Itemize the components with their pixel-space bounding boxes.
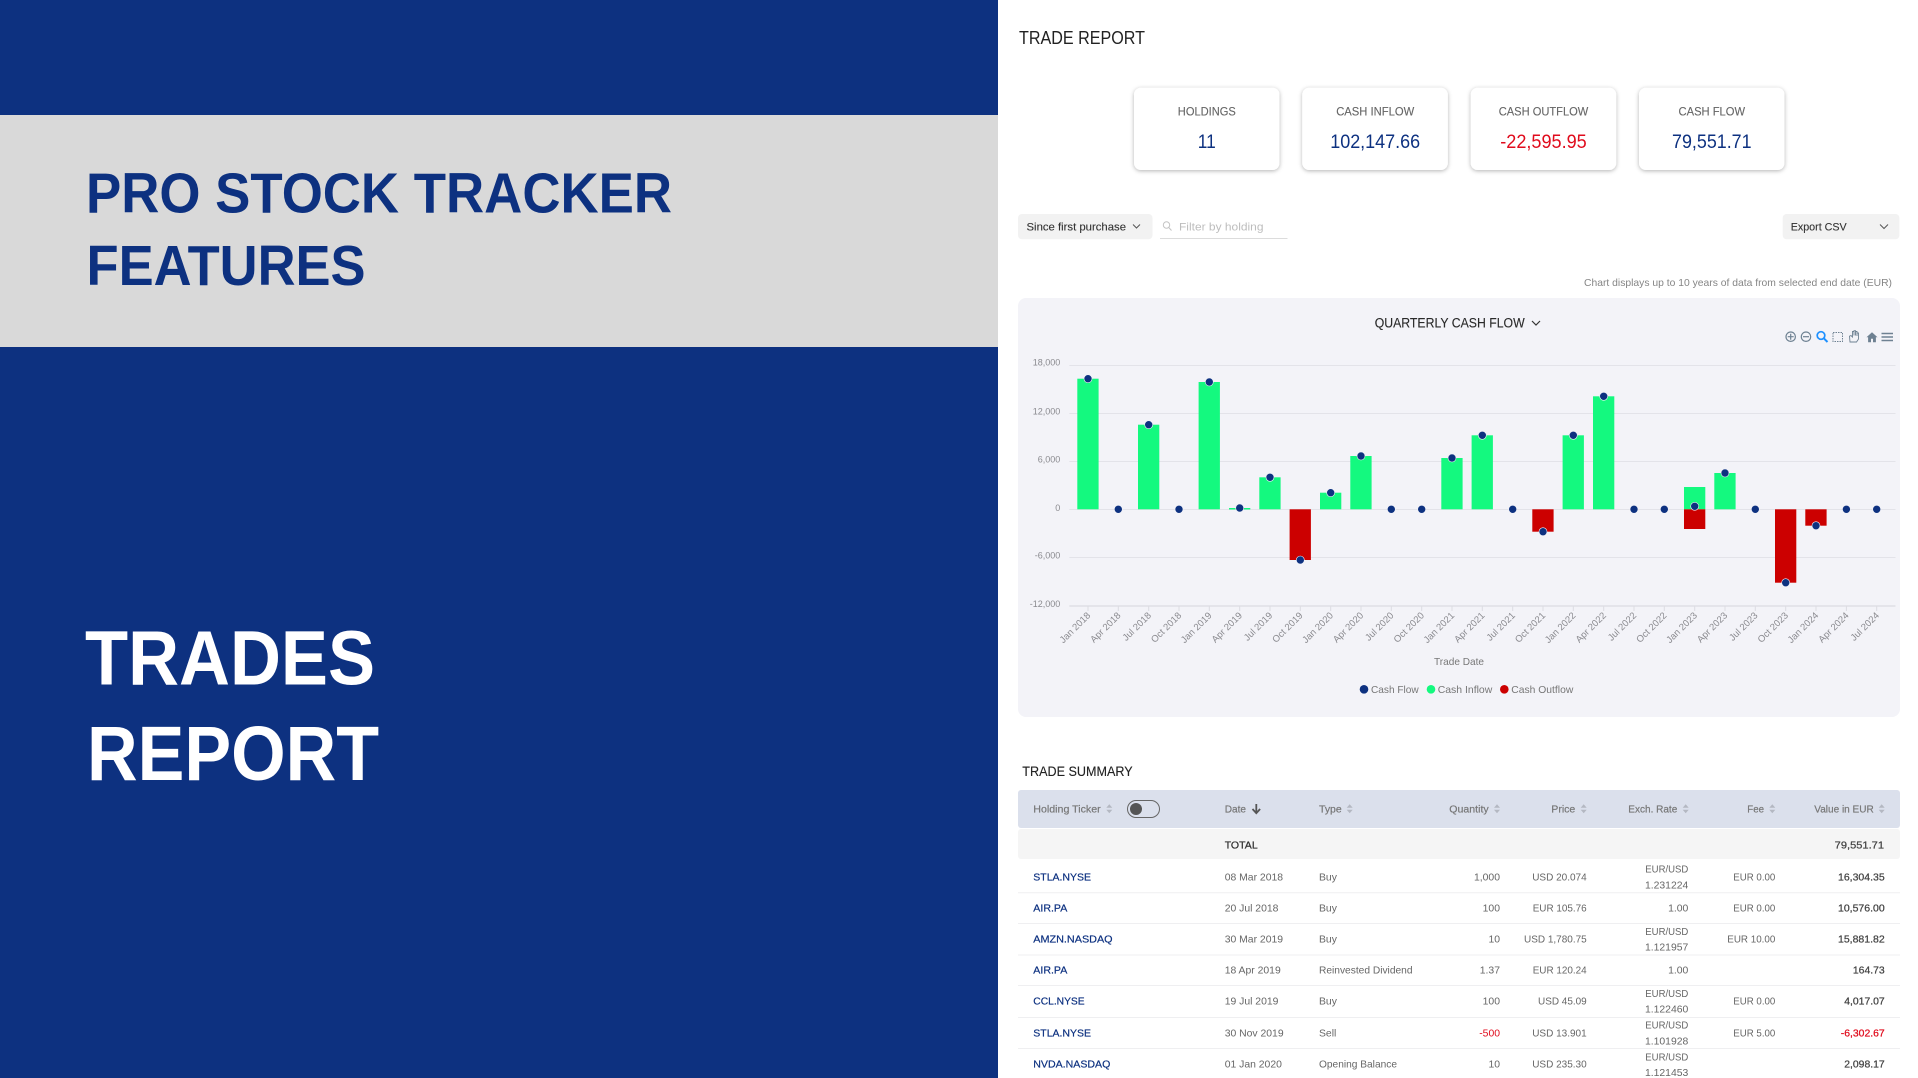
row: air.pa buy	[1033, 903, 1885, 914]
x axis labels: Apr 2023	[1695, 610, 1730, 645]
table header: Holding Ticker	[1033, 805, 1101, 816]
table header: Quantity	[1449, 805, 1490, 816]
table header: Price	[1551, 805, 1576, 816]
row: stla.nyse buy: 08 Mar 2018	[1225, 872, 1283, 883]
row: air.pa reinvested dividend: Reinvested Dividend	[1319, 966, 1413, 977]
dropdown: export csv	[1783, 214, 1899, 239]
row: stla.nyse sell: -6,302.67	[1841, 1028, 1885, 1039]
card: cash flow: 79,551.71	[1672, 131, 1752, 153]
row: air.pa buy: EUR 0.00	[1733, 903, 1775, 914]
x axis labels: Apr 2020	[1331, 610, 1366, 645]
card: holdings: 11	[1198, 131, 1216, 153]
x axis labels: Jan 2020	[1300, 610, 1336, 646]
row: air.pa buy: 20 Jul 2018	[1225, 903, 1279, 914]
panel: grey title band	[0, 115, 998, 347]
row: nvda.nasdaq opening balance	[1033, 1052, 1885, 1078]
chart toolbar icons	[1786, 331, 1893, 342]
row: ccl.nyse buy: 1.122460	[1645, 1005, 1689, 1016]
chart legend: Cash Inflow	[1438, 684, 1493, 696]
total row: TOTAL	[1225, 840, 1258, 852]
bars: cash inflow	[1077, 379, 1736, 510]
row: stla.nyse sell: USD 13.901	[1532, 1028, 1587, 1039]
row: nvda.nasdaq opening balance: Opening Balance	[1319, 1060, 1397, 1071]
row: air.pa reinvested dividend: EUR 120.24	[1533, 966, 1587, 977]
row: ccl.nyse buy: 100	[1483, 996, 1500, 1007]
dots: cash flow	[1084, 375, 1881, 587]
row: ccl.nyse buy: 19 Jul 2019	[1225, 996, 1279, 1007]
row: air.pa reinvested dividend: 18 Apr 2019	[1225, 966, 1281, 977]
row: air.pa reinvested dividend	[1033, 966, 1885, 977]
row: stla.nyse sell: 30 Nov 2019	[1225, 1028, 1284, 1039]
chart legend: Cash Flow	[1371, 684, 1419, 696]
table header: Type	[1319, 805, 1342, 816]
x axis labels: Oct 2018	[1149, 610, 1184, 645]
y axis labels	[1030, 358, 1060, 609]
y axis labels: 6,000	[1038, 454, 1060, 464]
x axis labels: Jan 2021	[1422, 610, 1457, 646]
row: nvda.nasdaq opening balance: NVDA.NASDAQ	[1033, 1060, 1110, 1071]
row: air.pa buy: 1.00	[1668, 903, 1689, 914]
heading: trades report	[85, 616, 379, 797]
table header: Exch. Rate	[1628, 805, 1678, 816]
x axis labels: Jul 2022	[1606, 610, 1639, 644]
panel: left blue background	[0, 0, 998, 1078]
row: stla.nyse sell: STLA.NYSE	[1033, 1028, 1091, 1039]
x axis labels: Apr 2021	[1452, 610, 1487, 645]
x axis labels: Apr 2024	[1816, 610, 1852, 645]
row: nvda.nasdaq opening balance: 01 Jan 2020	[1225, 1060, 1282, 1071]
row: stla.nyse buy: STLA.NYSE	[1033, 872, 1091, 883]
row: air.pa reinvested dividend: 164.73	[1853, 966, 1885, 977]
title: trade report: TRADE REPORT	[1019, 28, 1145, 48]
y axis labels: 12,000	[1033, 406, 1060, 416]
dropdown: since first purchase	[1018, 214, 1152, 239]
x axis labels: Jul 2021	[1485, 610, 1518, 644]
y axis labels: -12,000	[1030, 599, 1060, 609]
x axis labels: Jan 2019	[1179, 610, 1214, 646]
x axis labels: Jan 2023	[1664, 610, 1700, 646]
row: amzn.nasdaq buy: AMZN.NASDAQ	[1033, 935, 1113, 946]
y axis labels: 0	[1055, 503, 1060, 513]
card: holdings	[1134, 88, 1280, 170]
heading: pro stock tracker features: PRO STOCK TRACKER	[86, 162, 672, 224]
heading: pro stock tracker features: FEATURES	[86, 234, 366, 297]
row: amzn.nasdaq buy	[1033, 927, 1885, 954]
search: filter by holding	[1160, 222, 1288, 239]
card: cash inflow: CASH INFLOW	[1336, 107, 1414, 119]
row: nvda.nasdaq opening balance: 2,098.17	[1844, 1060, 1885, 1071]
row: stla.nyse sell: -500	[1479, 1028, 1500, 1039]
row: ccl.nyse buy: EUR/USD	[1645, 989, 1688, 1000]
panel: quarterly cash flow chart	[1018, 298, 1900, 717]
dropdown: since first purchase: Since first purchase	[1026, 222, 1126, 234]
row: ccl.nyse buy: USD 45.09	[1538, 996, 1587, 1007]
row: amzn.nasdaq buy: EUR/USD	[1645, 927, 1688, 938]
x axis labels: Jul 2018	[1121, 610, 1154, 644]
card: cash outflow: -22,595.95	[1500, 131, 1587, 153]
chart title: QUARTERLY CASH FLOW	[1375, 316, 1525, 331]
row: stla.nyse sell: 1.101928	[1645, 1036, 1689, 1047]
search: filter by holding: Filter by holding	[1179, 222, 1264, 234]
x axis labels: Apr 2022	[1574, 610, 1609, 645]
table header: Date	[1225, 805, 1246, 816]
table header: Value in EUR	[1814, 805, 1874, 816]
y axis labels: -6,000	[1035, 550, 1060, 560]
table header	[1018, 790, 1900, 828]
row: ccl.nyse buy: EUR 0.00	[1733, 996, 1775, 1007]
row: air.pa reinvested dividend: 1.37	[1480, 966, 1500, 977]
total row: 79,551.71	[1835, 840, 1884, 852]
table: trade summary	[1018, 790, 1900, 1078]
bars: cash outflow	[1290, 509, 1827, 583]
panel: trade report screenshot	[998, 0, 1918, 1078]
card: cash outflow: CASH OUTFLOW	[1499, 107, 1588, 119]
row: stla.nyse buy: 16,304.35	[1838, 872, 1885, 883]
row: amzn.nasdaq buy: EUR 10.00	[1727, 935, 1776, 946]
heading: trade summary: TRADE SUMMARY	[1022, 764, 1133, 779]
row: nvda.nasdaq opening balance: EUR/USD	[1645, 1052, 1688, 1063]
row: stla.nyse sell: Sell	[1319, 1028, 1336, 1039]
row: amzn.nasdaq buy: 1.121957	[1645, 943, 1689, 954]
row: air.pa buy: AIR.PA	[1033, 903, 1067, 914]
row: amzn.nasdaq buy: 10	[1488, 935, 1500, 946]
x axis labels	[1058, 610, 1882, 646]
row: ccl.nyse buy: CCL.NYSE	[1033, 996, 1085, 1007]
row: air.pa buy: 10,576.00	[1838, 903, 1885, 914]
gridlines and axis	[1069, 366, 1896, 611]
row: stla.nyse buy	[1033, 865, 1885, 891]
row: ccl.nyse buy	[1033, 989, 1885, 1016]
row: stla.nyse buy: 1,000	[1474, 872, 1500, 883]
row: stla.nyse sell	[1033, 1021, 1885, 1047]
row: stla.nyse sell: EUR 5.00	[1733, 1028, 1775, 1039]
row: amzn.nasdaq buy: Buy	[1319, 935, 1338, 946]
note: chart range: Chart displays up to 10 years of data from selected end date (EUR)	[1584, 277, 1892, 289]
x axis labels: Jul 2020	[1363, 610, 1396, 644]
row: amzn.nasdaq buy: 15,881.82	[1838, 935, 1885, 946]
row: air.pa buy: EUR 105.76	[1533, 903, 1587, 914]
x axis labels: Jul 2024	[1849, 610, 1882, 644]
row dividers	[1018, 893, 1900, 1048]
chart legend	[1360, 684, 1574, 696]
heading: pro stock tracker features	[86, 162, 672, 297]
x axis labels: Oct 2023	[1756, 610, 1791, 645]
dropdown: export csv: Export CSV	[1791, 222, 1847, 234]
table header: Fee	[1747, 805, 1764, 816]
row: stla.nyse buy: Buy	[1319, 872, 1338, 883]
x axis labels: Jan 2018	[1058, 610, 1093, 646]
row: air.pa reinvested dividend: 1.00	[1668, 966, 1689, 977]
chart legend: Cash Outflow	[1511, 684, 1574, 696]
total row	[1018, 829, 1900, 859]
card: cash flow: CASH FLOW	[1679, 107, 1745, 119]
row: stla.nyse buy: EUR/USD	[1645, 865, 1688, 876]
x axis title: Trade Date	[1434, 656, 1484, 668]
x axis labels: Jan 2022	[1543, 610, 1578, 646]
x axis labels: Oct 2021	[1513, 610, 1548, 645]
card: cash outflow	[1471, 88, 1616, 170]
x axis labels: Apr 2018	[1088, 610, 1123, 645]
row: nvda.nasdaq opening balance: USD 235.30	[1532, 1060, 1587, 1071]
heading: trades report: TRADES	[85, 616, 375, 702]
x axis labels: Oct 2022	[1634, 610, 1669, 645]
x axis labels: Oct 2019	[1270, 610, 1305, 645]
x axis labels: Oct 2020	[1392, 610, 1427, 645]
x axis labels: Jul 2019	[1242, 610, 1275, 644]
row: ccl.nyse buy: 4,017.07	[1844, 996, 1885, 1007]
row: stla.nyse buy: USD 20.074	[1532, 872, 1587, 883]
row: stla.nyse sell: EUR/USD	[1645, 1021, 1688, 1032]
row: air.pa buy: Buy	[1319, 903, 1338, 914]
heading: trades report: REPORT	[87, 711, 379, 797]
row: ccl.nyse buy: Buy	[1319, 996, 1338, 1007]
card: holdings: HOLDINGS	[1178, 107, 1236, 119]
x axis labels: Apr 2019	[1210, 610, 1245, 645]
card: cash inflow: 102,147.66	[1330, 131, 1420, 153]
card: cash flow	[1639, 88, 1784, 170]
card: cash inflow	[1302, 88, 1448, 170]
row: amzn.nasdaq buy: 30 Mar 2019	[1225, 935, 1283, 946]
y axis labels: 18,000	[1033, 358, 1060, 368]
row: nvda.nasdaq opening balance: 10	[1488, 1060, 1500, 1071]
row: air.pa buy: 100	[1483, 903, 1500, 914]
row: stla.nyse buy: 1.231224	[1645, 880, 1689, 891]
x axis labels: Jan 2024	[1786, 610, 1821, 646]
x axis labels: Jul 2023	[1727, 610, 1760, 644]
row: stla.nyse buy: EUR 0.00	[1733, 872, 1775, 883]
row: air.pa reinvested dividend: AIR.PA	[1033, 966, 1067, 977]
row: amzn.nasdaq buy: USD 1,780.75	[1524, 935, 1587, 946]
